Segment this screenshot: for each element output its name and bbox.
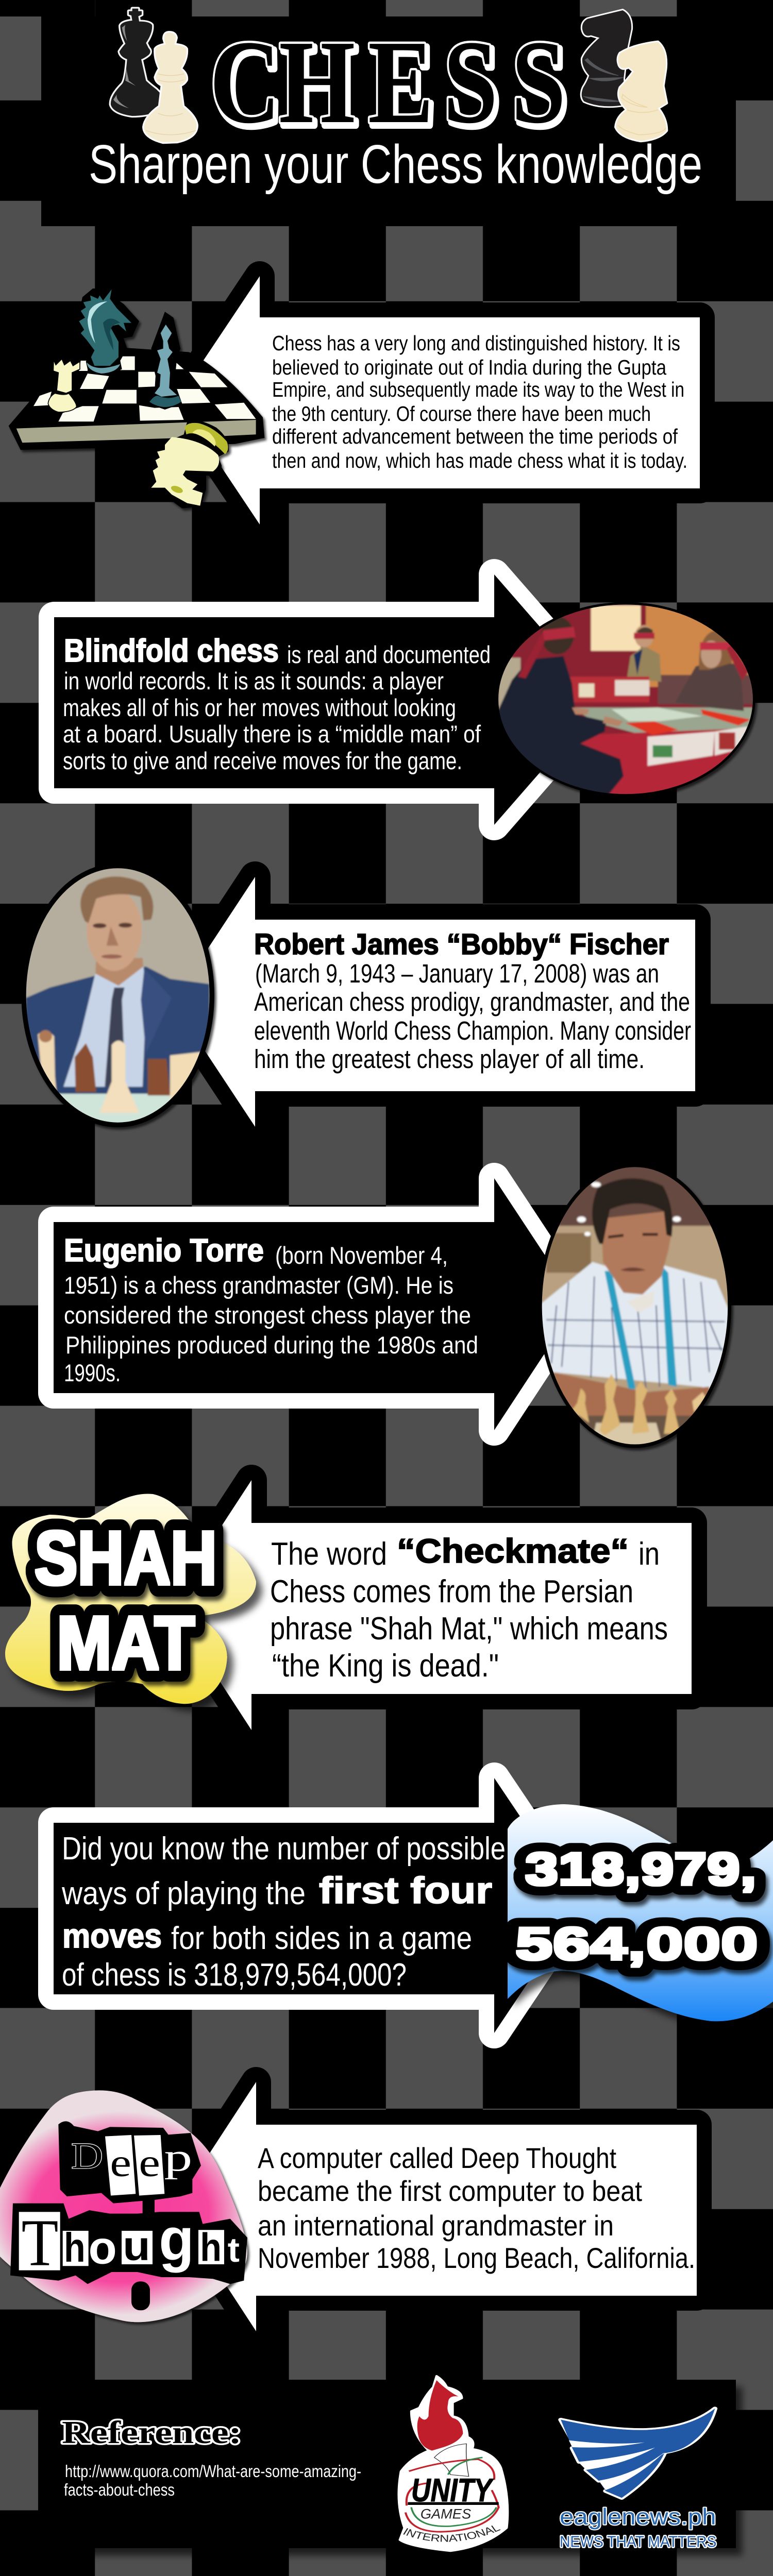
word: Thought: T (22, 2206, 58, 2280)
text: history (272, 331, 687, 472)
text: Deep Thought: became the first computer to beat (258, 2175, 642, 2207)
text: history: different advancement between the time periods of (272, 425, 678, 448)
panel: blindfold chess (54, 574, 763, 825)
word: MAT: MAT (57, 1601, 195, 1686)
text: reference URL (64, 2462, 361, 2499)
wing (561, 2409, 715, 2498)
icon: Deep Thought badge (0, 2090, 247, 2322)
photo: Eugenio Torre (536, 1163, 742, 1448)
title: CHESS: CHESS (212, 19, 568, 151)
text: Deep Thought: an international grandmaster in (258, 2209, 614, 2242)
word: SHAH: SHAH (35, 1516, 217, 1601)
text: first four moves: ways of playing the (61, 1876, 306, 1911)
logo: Unity Games International: GAMES (421, 2506, 471, 2521)
text: blindfold chess: in world records. It is as it sounds: a player (64, 667, 444, 694)
panel: history (9, 276, 700, 524)
arrow callout (170, 1480, 692, 1730)
text: history: the 9th century. Of course there have been much (272, 402, 651, 426)
text: first four moves: for both sides in a game (171, 1921, 472, 1956)
icon: chess board with pieces (9, 289, 264, 509)
panel: first four moves (54, 1778, 773, 2033)
title: CHESS: CHESS (210, 15, 566, 148)
word: Deep: e (139, 2140, 160, 2184)
text: blindfold chess: Blindfold chess (64, 633, 279, 669)
arrow callout (54, 574, 603, 825)
text: Eugenio Torre: considered the strongest chess player the (64, 1301, 471, 1329)
text: history: Chess has a very long and distinguished history. It is (272, 331, 680, 355)
word: Deep (58, 2121, 201, 2217)
word: Thought: g (159, 2206, 194, 2273)
photo: blindfold players (495, 598, 763, 804)
word: Thought: u (123, 2223, 150, 2269)
text: blindfold chess: makes all of his or her moves without looking (63, 694, 456, 721)
arrow callout (175, 2082, 697, 2331)
text: first four moves: first four (319, 1870, 492, 1911)
text: Eugenio Torre: 1951) is a chess grandmaster (GM). He is (64, 1272, 453, 1299)
text: Eugenio Torre: (born November 4, (275, 1242, 448, 1269)
text: blindfold chess: is real and documented (287, 641, 491, 668)
text: Bobby Fischer: Robert James “Bobby“ Fischer (254, 928, 669, 961)
word: Deep: D (71, 2136, 103, 2176)
logo: Unity Games International (397, 2375, 509, 2552)
logo: Unity Games International: UNITY (411, 2471, 494, 2509)
photo: Bobby Fischer (15, 860, 222, 1134)
arrow callout (54, 1178, 577, 1430)
text: Bobby Fischer (254, 928, 691, 1074)
text: reference URL: facts-about-chess (64, 2480, 175, 2499)
text: checkmate: phrase "Shah Mat," which means (270, 1611, 668, 1647)
panel: Bobby Fischer (15, 860, 695, 1134)
text: Eugenio Torre: Eugenio Torre (64, 1233, 264, 1268)
word: Thought: h (200, 2226, 222, 2269)
text: Deep Thought (258, 2142, 695, 2274)
text: checkmate: The word (271, 1536, 387, 1572)
blue blob (508, 1804, 773, 2021)
text: history: then and now, which has made chess what it is today. (272, 449, 687, 472)
text: Bobby Fischer: (March 9, 1943 – January 17, 2008) was an (255, 959, 659, 988)
text: history: believed to originate out of India during the Gupta (272, 355, 666, 379)
text: blindfold chess: sorts to give and receive moves for the game. (63, 747, 462, 774)
word: Deep: p (164, 2134, 192, 2179)
header block (41, 9, 736, 226)
word: Deep: e (110, 2140, 131, 2184)
text: checkmate: in (638, 1536, 660, 1572)
teal bishop (148, 312, 182, 410)
text: reference URL: http://www.quora.com/What-are-some-amazing- (65, 2462, 361, 2481)
arrow callout (54, 1778, 580, 2033)
word: Thought: t (228, 2231, 240, 2269)
text: blindfold chess (63, 633, 491, 774)
text: first four moves (61, 1831, 506, 1993)
number: 318,979,: 318,979, (525, 1843, 757, 1894)
panel: Eugenio Torre (54, 1163, 742, 1448)
heading: Reference: Reference: (62, 2415, 242, 2450)
wordmark: eaglenews.ph (560, 2504, 716, 2530)
number: 564,000: 564,000 (515, 1918, 758, 1969)
text: first four moves: of chess is 318,979,564,000? (62, 1957, 407, 1993)
arrow callout (173, 877, 695, 1127)
cream rook (48, 359, 80, 412)
teal knight (77, 289, 139, 375)
panel: checkmate (5, 1480, 692, 1730)
text: Deep Thought: A computer called Deep Thought (258, 2142, 616, 2174)
text: checkmate (270, 1532, 668, 1684)
text: checkmate: “Checkmate“ (397, 1532, 629, 1570)
footer block (38, 2375, 745, 2558)
word: Thought (10, 2204, 247, 2284)
icon: Shah Mat badge (5, 1494, 256, 1704)
text: Eugenio Torre (64, 1233, 478, 1386)
icon: chess knights (582, 10, 666, 141)
icon: chess kings (111, 9, 197, 142)
logo: eaglenews.ph (560, 2409, 716, 2550)
text: blindfold chess: at a board. Usually there is a “middle man” of (63, 720, 481, 748)
text: history: Empire, and subsequently made its way to the West in (272, 378, 684, 401)
word: Thought: h (64, 2225, 86, 2270)
yellow blob (5, 1494, 256, 1704)
text: Eugenio Torre: Philippines produced during the 1980s and (65, 1331, 478, 1359)
pink blob (0, 2090, 247, 2322)
text: checkmate: Chess comes from the Persian (270, 1574, 633, 1609)
text: Eugenio Torre: 1990s. (64, 1359, 121, 1386)
panel: Deep Thought (0, 2082, 697, 2331)
fallen cream knight (148, 420, 229, 509)
text: checkmate: “the King is dead." (272, 1648, 499, 1684)
text: Deep Thought: November 1988, Long Beach, California. (258, 2242, 695, 2274)
text: first four moves: moves (62, 1917, 162, 1955)
logo: Unity Games International: INTERNATIONAL (403, 2526, 501, 2542)
word: Thought: o (89, 2222, 117, 2274)
text: first four moves: Did you know the number of possible (62, 1831, 506, 1867)
text: Bobby Fischer: him the greatest chess player of all time. (254, 1044, 645, 1074)
arrow callout (177, 276, 700, 524)
stray mark (131, 2281, 150, 2310)
